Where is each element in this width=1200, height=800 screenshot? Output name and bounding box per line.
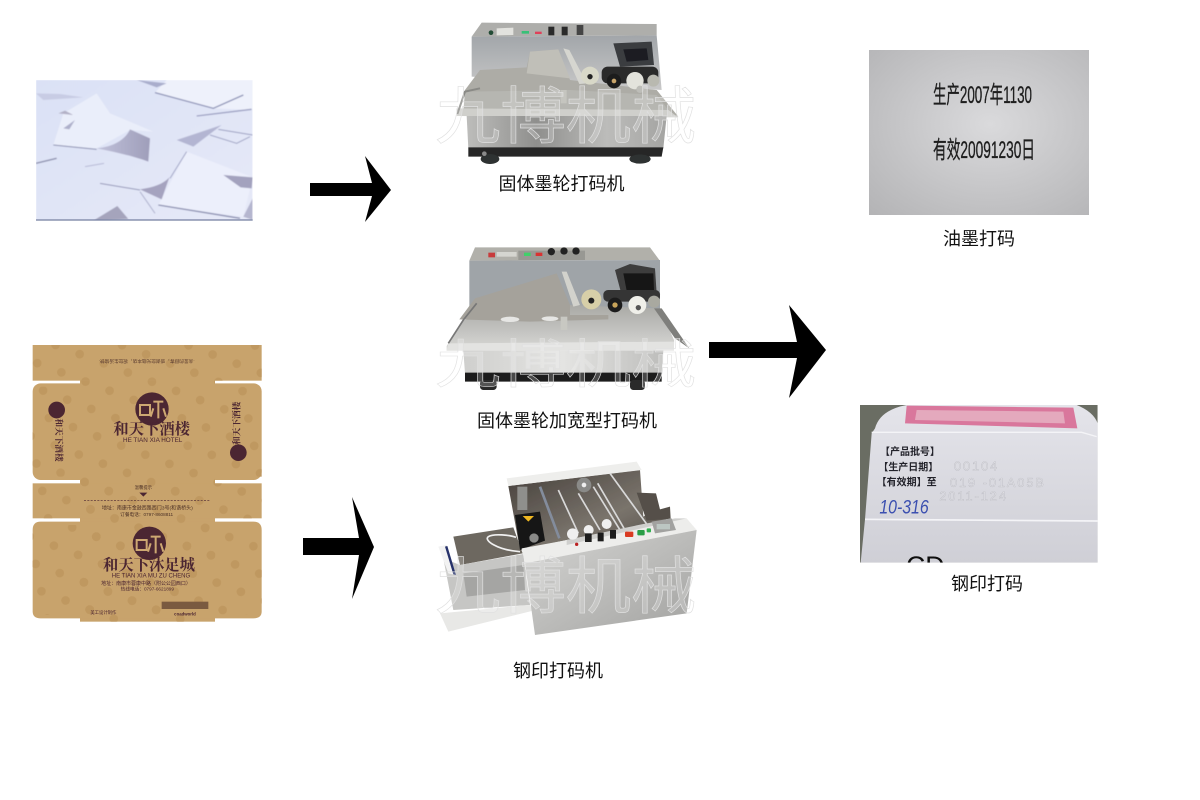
watermark: 九博机械 xyxy=(435,82,696,152)
machine: solid ink roller coder xyxy=(435,23,696,164)
upper logo and hotel name: HE TIAN XIA HOTEL xyxy=(123,437,183,444)
image: ink printed sample xyxy=(869,50,1089,215)
arrow: box to steel print machine xyxy=(303,497,374,599)
middle strip text: 订餐电话：0797-8608811 xyxy=(120,511,174,518)
image: ink printed sample: 生产2007年1130 xyxy=(933,82,1032,109)
label: machine 3: 钢印打码机 xyxy=(513,661,603,681)
arrow: machines to results xyxy=(709,305,826,398)
right side logo: 和天下酒楼 xyxy=(230,400,241,445)
middle strip text xyxy=(84,484,211,518)
upper logo and hotel name: 和天下酒楼 xyxy=(113,420,192,438)
label: steel printing: 钢印打码 xyxy=(951,574,1023,594)
lower logo and foot spa name xyxy=(90,527,208,616)
label: ink printing: 油墨打码 xyxy=(943,229,1015,249)
machine: steel stamp coder xyxy=(435,462,697,635)
lower logo and foot spa name: 热线电话：0797-6621899 xyxy=(121,585,174,592)
right side logo xyxy=(230,400,247,461)
image: steel stamped sample: CD xyxy=(906,551,945,581)
image: steel stamped sample xyxy=(860,405,1098,563)
label: machine 2: 固体墨轮加宽型打码机 xyxy=(477,411,657,431)
watermark: 九博机械 xyxy=(435,335,696,394)
lower logo and foot spa name: 美工设计制作 xyxy=(90,609,117,616)
image: steel stamped sample: 019 -01A05B xyxy=(950,476,1046,490)
image: steel stamped sample: 00104 xyxy=(954,459,999,473)
left side logo: 和天下酒楼 xyxy=(54,418,65,463)
lower logo and foot spa name: HE TIAN XIA MU ZU CHENG xyxy=(112,573,191,579)
lower logo and foot spa name: 和天下沐足城 xyxy=(103,556,196,574)
lower logo and foot spa name: 地址：南康市蓉康中路（附公公园西口） xyxy=(101,580,191,587)
image: white paper sheets xyxy=(36,80,253,221)
label: machine 1: 固体墨轮打码机 xyxy=(498,174,624,194)
image: steel stamped sample: 【产品批号】 xyxy=(880,445,940,458)
lower logo and foot spa name: coadworld xyxy=(174,611,196,616)
middle strip text: 地址：南康市金鼓西路西门3号(和谐桥头) xyxy=(102,504,193,511)
upper logo and hotel name xyxy=(113,392,192,444)
left side logo xyxy=(48,402,65,463)
box die-cut shape xyxy=(33,345,262,622)
middle strip text: 温馨提示 xyxy=(135,484,153,491)
arrow: paper to machine xyxy=(310,156,391,222)
image: steel stamped sample: 10-316 xyxy=(879,497,929,518)
image: steel stamped sample: 2011-124 xyxy=(939,489,1008,503)
image: steel stamped sample: 【有效期】至 xyxy=(877,476,937,489)
watermark: 九博机械 xyxy=(435,552,696,622)
machine: wide solid ink roller coder xyxy=(435,247,696,394)
image: printed tissue box flat xyxy=(33,345,262,622)
top flap text: ·亲爱的顾客，感谢您光临本店，祝您生活愉快· xyxy=(99,357,195,364)
image: ink printed sample: 有效20091230日 xyxy=(933,137,1035,164)
image: steel stamped sample: 【生产日期】 xyxy=(878,460,938,473)
